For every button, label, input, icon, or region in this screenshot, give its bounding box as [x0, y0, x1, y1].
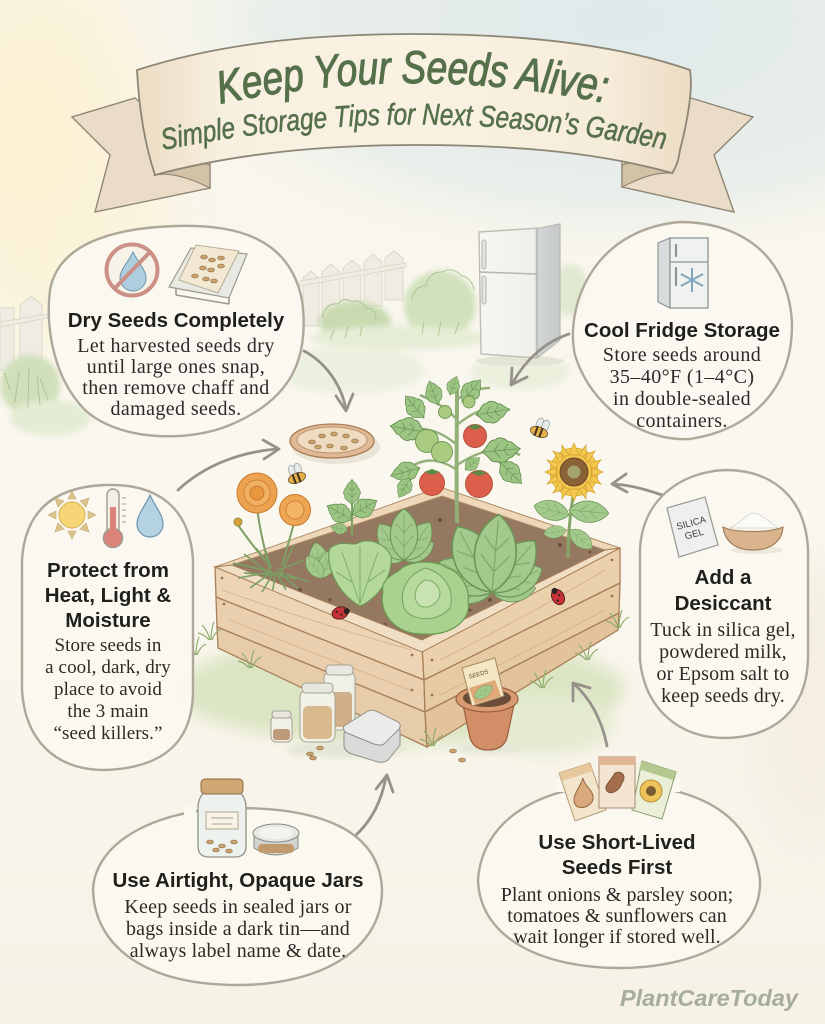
- herb seedling: [322, 479, 382, 536]
- loose seeds: [307, 752, 313, 756]
- brand credit: PlantCareToday: [620, 985, 800, 1011]
- tall jar: [324, 665, 355, 730]
- description: then remove chaff and: [82, 377, 270, 399]
- description: tomatoes & sunflowers can: [507, 905, 727, 927]
- icon: thermometer: [104, 489, 126, 548]
- soil: [232, 496, 605, 640]
- dish of seeds: [290, 424, 380, 464]
- marigold flowers: [233, 473, 310, 592]
- seed jars and tin by the bed: [271, 665, 465, 762]
- tomato plant: [388, 374, 529, 523]
- description: bags inside a dark tin—and: [126, 918, 350, 940]
- icon: seed packets: [556, 757, 680, 821]
- description: wait longer if stored well.: [513, 926, 721, 948]
- icon: bowl of powder: [723, 513, 783, 554]
- back rim: [215, 487, 620, 567]
- leafy vegetables: [301, 479, 548, 634]
- spinach large plant: [431, 513, 548, 606]
- description: keep seeds dry.: [661, 685, 785, 707]
- icon: silica gel packet: GEL: [684, 527, 705, 542]
- small jar: [271, 711, 292, 742]
- heading: Heat, Light &: [45, 584, 171, 607]
- icon: water drop: [137, 495, 163, 537]
- medium jar: [300, 683, 335, 742]
- icon: silica gel packet: [667, 497, 718, 557]
- heading: Protect from: [47, 559, 169, 582]
- panel: protect from heat, light and moisture: [22, 485, 193, 770]
- romaine lettuce: [329, 541, 391, 606]
- heading: Cool Fridge Storage: [584, 319, 780, 342]
- metal tin: [343, 710, 400, 762]
- bushes: [0, 264, 588, 436]
- fence: [0, 251, 406, 373]
- arrow: desiccant to sunflower: [612, 474, 662, 495]
- description: place to avoid: [54, 679, 162, 700]
- description: “seed killers.”: [53, 723, 163, 744]
- description: or Epsom salt to: [657, 663, 789, 685]
- icon: no moisture: [106, 244, 158, 296]
- icon: fridge with snowflake: [658, 238, 708, 308]
- panel: add a desiccant: [640, 470, 808, 738]
- left face planks: [215, 567, 424, 680]
- heading: Dry Seeds Completely: [68, 309, 285, 332]
- arrow: short-lived seeds to pot: [573, 683, 607, 746]
- heading: Use Short-Lived: [538, 831, 696, 854]
- icon: sealed jar: [184, 779, 246, 857]
- sunflower: [532, 443, 610, 558]
- spinach centre plant: [367, 509, 440, 569]
- ribbon tails: [72, 98, 210, 212]
- garden backdrop: fence and bushes: [0, 251, 588, 436]
- arrow: protect to bed: [178, 440, 279, 490]
- heading: Seeds First: [562, 856, 672, 879]
- heading: Use Airtight, Opaque Jars: [112, 869, 364, 892]
- description: powdered milk,: [659, 641, 787, 663]
- icon: silica gel packet: SILICA: [675, 514, 708, 533]
- icon: small tin: [253, 824, 299, 855]
- title ribbon banner: [70, 33, 754, 213]
- description: damaged seeds.: [110, 398, 242, 420]
- bees: [284, 416, 552, 486]
- description: 35–40°F (1–4°C): [610, 366, 754, 388]
- arrow: dry seeds to dish: [304, 351, 353, 411]
- panel: use airtight, opaque jars: [93, 779, 382, 985]
- title line 2: Simple Storage Tips for Next Season’s Garden: [162, 102, 666, 150]
- sunflower packet: [632, 761, 676, 819]
- description: the 3 main: [67, 701, 149, 722]
- terracotta pot with seed packet: SEEDS: [468, 669, 489, 681]
- panel: cool fridge storage: [573, 222, 792, 439]
- raised garden bed: [183, 487, 629, 747]
- heading: Add a: [695, 566, 752, 589]
- icon: drying tray: [169, 245, 247, 304]
- front rim: [215, 548, 620, 652]
- description: always label name & date.: [130, 940, 346, 962]
- description: containers.: [636, 410, 728, 432]
- terracotta pot with seed packet: [456, 658, 522, 754]
- grass tufts: [198, 622, 221, 640]
- onion packet: [559, 763, 606, 821]
- description: Store seeds in: [55, 635, 162, 656]
- description: Tuck in silica gel,: [650, 619, 796, 641]
- ladybugs: [331, 585, 567, 621]
- description: in double-sealed: [613, 388, 751, 410]
- description: Plant onions & parsley soon;: [501, 884, 733, 906]
- refrigerator in the background: [476, 224, 564, 366]
- title line 1: Keep Your Seeds Alive:: [219, 50, 610, 104]
- icon: sun: [48, 491, 96, 539]
- description: until large ones snap,: [87, 356, 265, 378]
- ribbon body: [137, 34, 691, 175]
- ground wash under the raised bed: [175, 635, 625, 755]
- petals: [545, 443, 603, 501]
- heading: Desiccant: [675, 592, 772, 615]
- bean packet: [599, 757, 635, 808]
- description: Keep seeds in sealed jars or: [124, 896, 352, 918]
- description: a cool, dark, dry: [45, 657, 171, 678]
- panel: dry seeds completely: [49, 226, 304, 436]
- right face planks: [422, 548, 620, 680]
- panel: use short-lived seeds first: [478, 757, 760, 968]
- butterhead lettuce: [382, 562, 468, 634]
- arrow: jars to bed: [356, 775, 393, 835]
- description: Let harvested seeds dry: [77, 335, 275, 357]
- small greens: [301, 541, 340, 582]
- heading: Moisture: [65, 609, 151, 632]
- tomatoes: [420, 424, 492, 498]
- description: Store seeds around: [603, 344, 761, 366]
- arrow: fridge to bed: [511, 334, 569, 385]
